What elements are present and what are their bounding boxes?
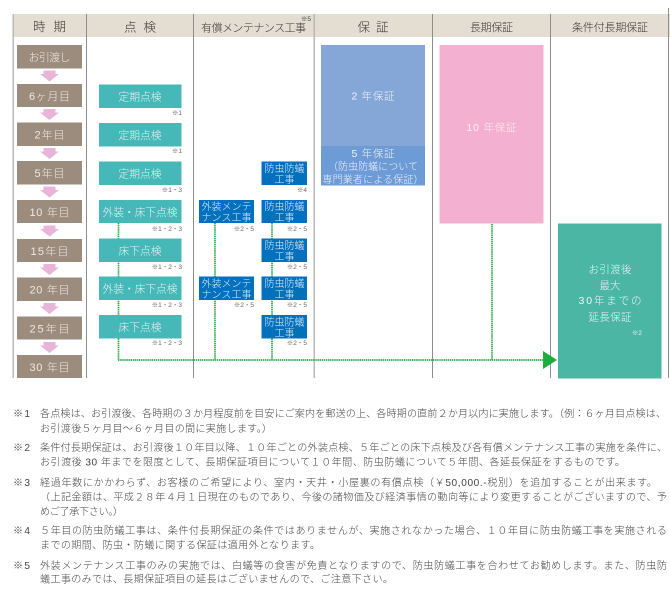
inspection: 定期点検 5年目 bbox=[99, 162, 182, 194]
footnote 5: 外装メンテナンス工事のみの実施では、白蟻等の食害が免責となりますので、防虫防蟻工事を合わせてお勧めします。また、防虫防 bbox=[40, 559, 667, 572]
work: 防虫防蟻工事 20年目: ※2・5 bbox=[287, 302, 307, 309]
panel: warranty bbox=[321, 45, 425, 186]
table header band bbox=[13, 14, 670, 37]
inspection: 床下点検 15年目 bbox=[99, 238, 182, 271]
inspection: 床下点検 15年目: 床下点検 bbox=[118, 244, 162, 258]
arrow bbox=[40, 342, 59, 353]
work: 防虫防蟻工事 5年目: 防虫防蟻 bbox=[264, 162, 304, 175]
footnote 3: 経過年数にかかわらず、お客様のご希望により、室内・天井・小屋裏の有償点検（￥50,000.-税別）を追加することが出来ます。 bbox=[40, 476, 657, 489]
period: 25年目: 25年目 bbox=[30, 322, 70, 336]
work: 防虫防蟻工事 10年目: 防虫防蟻 bbox=[264, 200, 304, 213]
5年保証 block bbox=[321, 146, 425, 186]
footnote 3 bbox=[13, 476, 667, 518]
footnote 1: 各点検は、お引渡後、各時期の３か月程度前を目安にご案内を郵送の上、各時期の直前２か月以内に実施します。（例：６ヶ月目点検は、 bbox=[40, 407, 666, 420]
panel: conditional long-term warranty bbox=[558, 224, 662, 378]
heading: 時期: 時 期 bbox=[33, 20, 66, 34]
2年保証 block bbox=[321, 45, 425, 146]
arrow bbox=[40, 264, 59, 275]
inspection: 外装・床下点検 10年目 bbox=[99, 200, 182, 233]
work: 外装メンテナンス工事 10年目: ナンス工事 bbox=[202, 212, 252, 224]
period: 30年目 bbox=[17, 355, 82, 378]
footnote 2: 条件付長期保証は、お引渡後１０年目以降、１０年ごとの外装点検、５年ごとの床下点検及び各有償メンテナンス工事の実施を条件に、 bbox=[40, 441, 667, 454]
green dotted connector lines bbox=[118, 223, 544, 360]
arrow bbox=[40, 303, 59, 314]
work: 防虫防蟻工事 15年目: ※2・5 bbox=[287, 264, 307, 271]
arrow bbox=[40, 109, 59, 120]
inspection: 外装・床下点検 20年目: 外装・床下点検 bbox=[102, 282, 178, 296]
footnote 5: ※5 bbox=[13, 561, 30, 572]
arrow bbox=[40, 226, 59, 236]
heading: 保証: 保 証 bbox=[358, 20, 388, 34]
panel: conditional long-term warranty: ※2 bbox=[632, 330, 642, 337]
period: お引渡し: お引渡し bbox=[28, 51, 70, 64]
period: 6ヶ月目 bbox=[17, 84, 82, 107]
footnote 1 bbox=[13, 407, 666, 435]
panel: long-term warranty, 10年保証 bbox=[440, 45, 544, 224]
inspection: 定期点検 5年目: ※1・3 bbox=[162, 187, 182, 194]
work: 外装メンテナンス工事 20年目: 外装メンテ bbox=[202, 277, 252, 290]
work: 防虫防蟻工事 10年目 bbox=[262, 200, 307, 233]
inspection: 定期点検 2年目 bbox=[99, 123, 182, 155]
inspection: 床下点検 25年目: 床下点検 bbox=[118, 320, 162, 334]
work: 防虫防蟻工事 15年目: 工事 bbox=[274, 251, 294, 263]
footnote 1: お引渡後５ヶ月目〜６ヶ月目の間に実施します。） bbox=[40, 423, 272, 435]
inspection: 外装・床下点検 20年目: ※1・2・3 bbox=[152, 302, 182, 309]
work: 外装メンテナンス工事 10年目: ※2・5 bbox=[234, 226, 254, 233]
footnote 3: （上記金額は、平成２８年４月１日現在のものであり、今後の諸物価及び経済事情の動向等により変更することがございますので、予 bbox=[40, 490, 667, 504]
footnote 3: ※3 bbox=[13, 478, 30, 489]
footnote 5 bbox=[13, 559, 667, 586]
inspection: 外装・床下点検 10年目: 外装・床下点検 bbox=[102, 205, 178, 219]
footnote 4: までの期間、防虫・防蟻に関する保証は適用外となります。 bbox=[40, 538, 320, 552]
5年保証 block: （防虫防蟻について bbox=[328, 160, 418, 173]
panel: conditional long-term warranty: 最大 bbox=[600, 280, 620, 292]
column: period timeline bbox=[17, 45, 82, 378]
work: 防虫防蟻工事 20年目: 防虫防蟻 bbox=[264, 277, 304, 290]
period: 25年目 bbox=[17, 316, 82, 340]
period: お引渡し bbox=[17, 45, 82, 68]
heading: 条件付長期保証: 条件付長期保証 bbox=[572, 20, 648, 34]
panel: conditional long-term warranty: 30年までの bbox=[578, 295, 642, 307]
arrow bbox=[40, 186, 59, 198]
period: 10年目 bbox=[17, 200, 82, 223]
period: 10年目: 10 年目 bbox=[30, 206, 70, 219]
panel: conditional long-term warranty: 延長保証 bbox=[588, 312, 632, 324]
period: 20年目 bbox=[17, 278, 82, 301]
footnote 4 bbox=[13, 524, 667, 552]
work: 防虫防蟻工事 15年目 bbox=[262, 238, 307, 271]
inspection: 定期点検 2年目: ※1 bbox=[172, 148, 182, 155]
inspection: 外装・床下点検 20年目 bbox=[99, 276, 182, 309]
column dividers bbox=[12, 8, 669, 378]
footnote 2: ※2 bbox=[13, 443, 30, 454]
inspection: 定期点検 6ヶ月目 bbox=[99, 84, 182, 117]
footnote 2 bbox=[13, 441, 667, 468]
work: 防虫防蟻工事 25年目: ※2・5 bbox=[287, 340, 307, 347]
5年保証 block: 5 年保証 bbox=[352, 148, 395, 160]
inspection: 床下点検 25年目: ※1・2・3 bbox=[152, 340, 182, 347]
work: 防虫防蟻工事 10年目: ※2・5 bbox=[287, 226, 307, 233]
panel: conditional long-term warranty: お引渡後 bbox=[588, 264, 632, 276]
work: 防虫防蟻工事 15年目: 防虫防蟻 bbox=[264, 239, 304, 252]
period: 6ヶ月目: 6ヶ月目 bbox=[29, 91, 70, 103]
heading note: ※5: ※5 bbox=[301, 16, 311, 23]
heading: 点検: 点 検 bbox=[124, 20, 156, 34]
inspection: 床下点検 25年目 bbox=[99, 315, 182, 347]
arrow bbox=[40, 148, 59, 159]
period: 5年目: 5年目 bbox=[34, 167, 64, 180]
inspection: 定期点検 6ヶ月目: 定期点検 bbox=[118, 90, 162, 104]
work: 防虫防蟻工事 25年目: 防虫防蟻 bbox=[264, 316, 304, 328]
footnote 4: ５年目の防虫防蟻工事は、条件付長期保証の条件ではありませんが、実施されなかった場合、１０年目に防虫防蟻工事を実施される bbox=[40, 524, 667, 537]
work: 防虫防蟻工事 5年目: 工事 bbox=[274, 174, 294, 186]
column: inspections bbox=[99, 84, 182, 347]
work: 外装メンテナンス工事 10年目: 外装メンテ bbox=[202, 200, 252, 213]
period: 5年目 bbox=[17, 161, 82, 184]
work: 外装メンテナンス工事 10年目 bbox=[199, 200, 254, 233]
work: 防虫防蟻工事 10年目: 工事 bbox=[274, 212, 294, 224]
footnotes bbox=[13, 407, 667, 586]
work: 防虫防蟻工事 5年目 bbox=[262, 162, 307, 194]
panel: long-term warranty, 10年保証: 10 年保証 bbox=[466, 122, 517, 134]
period: 2年目 bbox=[17, 122, 82, 146]
work: 防虫防蟻工事 5年目: ※4 bbox=[297, 187, 307, 194]
inspection: 外装・床下点検 10年目: ※1・2・3 bbox=[152, 226, 182, 233]
inspection: 定期点検 5年目: 定期点検 bbox=[118, 166, 162, 180]
work: 防虫防蟻工事 25年目 bbox=[262, 315, 307, 347]
column: paid maintenance work bbox=[199, 162, 307, 347]
inspection: 定期点検 6ヶ月目: ※1 bbox=[172, 110, 182, 117]
footnote 5: 蟻工事のみでは、長期保証項目の延長はございませんので、ご注意下さい。 bbox=[40, 572, 393, 586]
arrow bbox=[40, 70, 59, 82]
work: 外装メンテナンス工事 20年目 bbox=[199, 276, 254, 309]
footnote 4: ※4 bbox=[13, 526, 30, 537]
inspection: 床下点検 15年目: ※1・2・3 bbox=[152, 264, 182, 271]
period: 15年目 bbox=[17, 239, 82, 262]
arrow: to conditional warranty bbox=[543, 351, 557, 369]
work: 外装メンテナンス工事 20年目: ※2・5 bbox=[234, 302, 254, 309]
period: 2年目: 2年目 bbox=[34, 128, 64, 142]
footnote 2: お引渡後 30 年までを限度として、長期保証項目について１０年間、防虫防蟻について５年間、各延長保証をするものです。 bbox=[40, 456, 625, 468]
period: 20年目: 20 年目 bbox=[30, 284, 70, 296]
work: 防虫防蟻工事 20年目: 工事 bbox=[274, 289, 294, 301]
work: 防虫防蟻工事 20年目 bbox=[262, 276, 307, 309]
5年保証 block: 専門業者による保証） bbox=[322, 174, 424, 186]
2年保証 block: 2 年保証 bbox=[352, 90, 395, 102]
inspection: 定期点検 2年目: 定期点検 bbox=[118, 128, 162, 142]
footnote 3: めご了承下さい。） bbox=[40, 506, 123, 518]
work: 防虫防蟻工事 25年目: 工事 bbox=[274, 328, 294, 340]
period: 15年目: 15年目 bbox=[30, 245, 68, 258]
period: 30年目: 30 年目 bbox=[30, 361, 70, 374]
heading: 有償メンテナンス工事: 有償メンテナンス工事 bbox=[201, 22, 306, 34]
work: 外装メンテナンス工事 20年目: ナンス工事 bbox=[202, 289, 252, 301]
footnote 1: ※1 bbox=[13, 409, 30, 420]
heading: 長期保証: 長期保証 bbox=[470, 21, 513, 34]
